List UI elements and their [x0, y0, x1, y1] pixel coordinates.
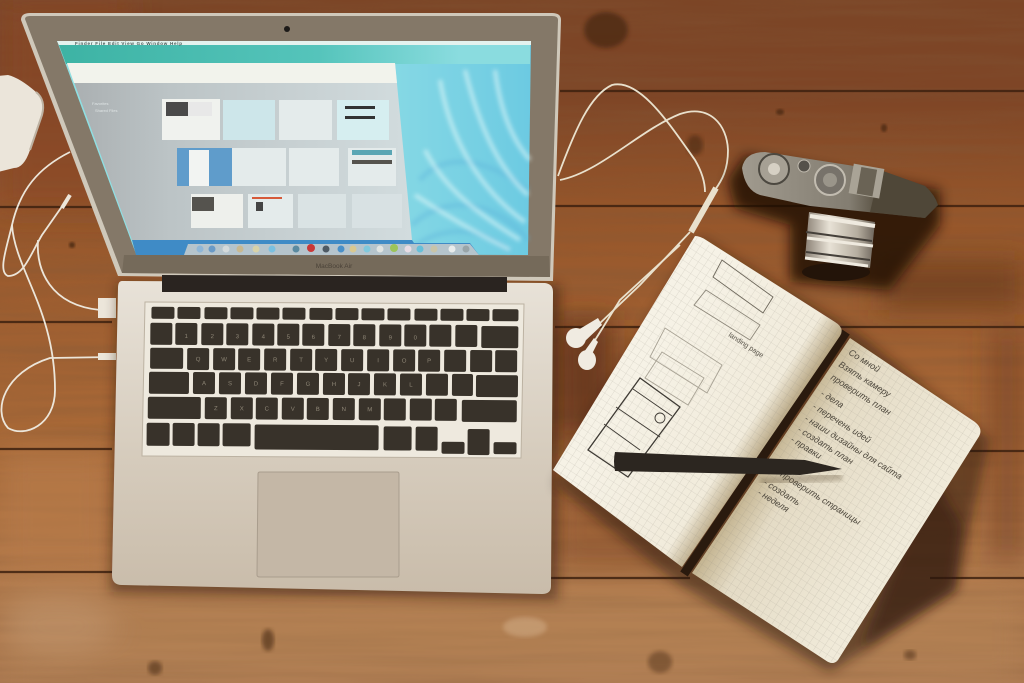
key letters: W — [221, 357, 227, 363]
key letters: U — [350, 358, 354, 364]
key letters: D — [254, 381, 259, 387]
key letters: I — [377, 358, 379, 364]
laptop lid — [21, 13, 561, 281]
handwritten notes: - перечень идей — [811, 401, 873, 445]
pen — [614, 452, 842, 482]
key letters: G — [306, 382, 311, 388]
key letters: 5 — [287, 335, 291, 341]
finder window — [67, 63, 412, 240]
open notebook — [553, 236, 990, 672]
key letters: E — [247, 357, 251, 363]
key letters: L — [409, 383, 413, 389]
key letters: 6 — [312, 335, 316, 341]
handwritten notes: - создать — [762, 477, 802, 508]
keyboard well — [142, 302, 524, 458]
handwritten notes: - неделя — [756, 487, 791, 514]
dock — [184, 244, 479, 255]
sidebar labels — [92, 101, 117, 113]
key letters: H — [332, 382, 336, 388]
key letters: Q — [196, 357, 201, 363]
laptop — [21, 13, 561, 600]
key letters: R — [273, 358, 278, 364]
camera body — [742, 152, 938, 218]
key letters: Z — [214, 406, 218, 412]
trackpad — [257, 472, 399, 577]
key letters: 9 — [389, 335, 393, 341]
key letters: 0 — [414, 336, 418, 342]
spine — [684, 332, 846, 574]
keyboard keys — [146, 307, 518, 455]
key letters: O — [402, 358, 407, 365]
key letters: F — [280, 382, 284, 388]
key letters: 2 — [211, 334, 215, 340]
earphone cords — [558, 84, 705, 192]
handwritten notes — [756, 347, 904, 527]
camera dials — [759, 154, 845, 195]
handwritten notes: - наши дизайны для сайта — [803, 413, 904, 482]
power adapter — [0, 75, 43, 172]
key letters: S — [228, 381, 232, 387]
key letters: 3 — [236, 334, 240, 340]
key letters: A — [202, 381, 206, 387]
left page — [553, 236, 842, 567]
earbuds — [566, 318, 602, 370]
handwritten notes: Со мной — [847, 347, 882, 374]
model name: MacBook Air — [316, 263, 353, 270]
notebook shadow — [555, 238, 990, 672]
earphone remote — [691, 188, 716, 232]
earphones — [558, 84, 728, 370]
key letters: B — [316, 407, 320, 413]
sketch wireframes — [588, 260, 773, 477]
key letters: J — [357, 382, 360, 388]
sidebar labels: Favorites — [92, 101, 108, 106]
key letters: 1 — [185, 334, 189, 340]
thumbnails — [162, 99, 402, 228]
key letters: V — [291, 407, 295, 413]
key letters: 7 — [338, 335, 342, 341]
laptop base — [112, 281, 553, 594]
key letters: T — [299, 358, 303, 364]
key letters: C — [265, 407, 270, 413]
handwritten notes: проверить план — [829, 372, 893, 417]
key letters: X — [240, 406, 244, 412]
handwritten notes: Взять камеру — [837, 359, 893, 399]
handwritten notes: - дела — [819, 388, 846, 410]
key letters: Y — [324, 358, 328, 364]
laptop shadow — [110, 283, 560, 600]
hinge — [162, 275, 507, 292]
key letters: K — [383, 382, 387, 388]
screen wallpaper — [57, 41, 531, 255]
handwritten notes: - правки — [789, 434, 823, 461]
handwritten notes: - проверить страницы — [774, 466, 863, 527]
vintage camera — [728, 152, 940, 290]
key letters: M — [367, 407, 372, 413]
camera shadow — [728, 155, 940, 290]
key letters: N — [342, 407, 346, 413]
camera lens — [802, 212, 875, 281]
desktop strip — [132, 240, 479, 255]
handwritten notes: - создать план — [796, 424, 855, 466]
left charging and earphone cables — [1, 152, 116, 431]
key letters: 8 — [363, 335, 367, 341]
key letters: 4 — [262, 334, 266, 341]
key letters — [184, 334, 431, 414]
right page — [692, 338, 980, 664]
cover shadow patch — [860, 470, 962, 650]
sidebar labels: Shared Files — [95, 108, 117, 113]
key letters: P — [427, 359, 431, 365]
screen wallpaper: Finder File Edit View Go Window Help — [75, 41, 182, 46]
sketch caption: landing page — [727, 332, 764, 360]
